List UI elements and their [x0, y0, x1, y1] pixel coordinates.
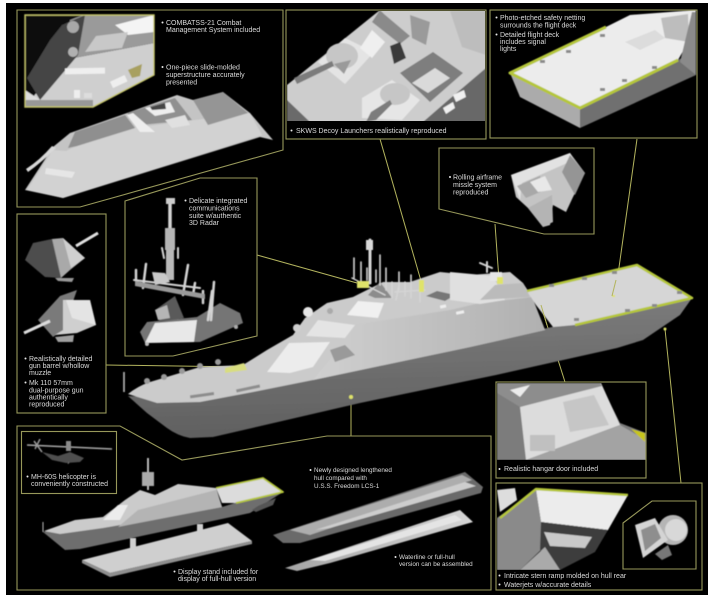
text: helicopter: conveniently constructed — [31, 481, 108, 488]
panel: gun — [17, 214, 106, 413]
text: waterline: Waterline or full-hull — [399, 554, 455, 561]
launcher render — [287, 10, 486, 122]
text: Mk 110 — [24, 380, 84, 408]
waterjet inset — [623, 501, 696, 569]
panel: communications suite — [125, 178, 257, 356]
text: communications: 3D Radar — [189, 220, 220, 227]
text: flight deck — [496, 32, 560, 53]
text: waterline — [394, 554, 473, 568]
text: rolling airframe — [449, 174, 502, 196]
text: communications — [184, 198, 247, 227]
panel frame — [17, 214, 106, 413]
text: new hull: hull compared with — [314, 475, 367, 482]
display stand — [82, 523, 252, 577]
flight deck render — [510, 10, 696, 128]
text: gun barrel: gun barrel w/hollow — [29, 363, 90, 370]
text: helicopter: MH-60S helicopter is — [31, 474, 96, 481]
deck signal lights — [549, 271, 682, 321]
panel frame — [125, 178, 257, 356]
waterjet render — [635, 515, 688, 560]
communications render — [134, 198, 243, 346]
text: rolling airframe: reproduced — [453, 190, 489, 196]
text: Mk 110: dual-purpose gun — [29, 388, 84, 394]
helicopter render — [27, 439, 112, 464]
text: Mk 110: authentically — [29, 394, 68, 402]
text: combat system: COMBATSS-21 Combat — [166, 20, 241, 27]
text: rolling airframe: Rolling airframe — [453, 174, 502, 182]
aft deckhouse details — [440, 262, 530, 315]
text: safety netting: surrounds the flight deck — [500, 22, 577, 30]
panel frame — [286, 10, 486, 139]
text: communications: suite w/authentic — [189, 213, 242, 220]
text: superstructure: superstructure accurately — [166, 72, 245, 79]
panel: combat system — [17, 10, 283, 207]
inset: superstructure interior — [25, 15, 273, 198]
gun renders — [24, 233, 98, 342]
text: display stand — [174, 569, 259, 583]
inset: helicopter — [22, 432, 116, 494]
hangar render — [497, 383, 646, 460]
text: communications: Delicate integrated — [189, 198, 247, 205]
forward deck fittings — [124, 359, 260, 398]
panel frame — [490, 10, 697, 138]
flight deck — [527, 265, 692, 327]
text: communications: communications — [189, 206, 240, 212]
leader over flight deck — [612, 280, 616, 296]
leader lines — [106, 139, 681, 483]
panel frame — [439, 148, 594, 234]
bridge front panels — [267, 342, 330, 373]
text: stern ramp: Intricate stern ramp molded on hull rear — [504, 573, 627, 580]
text: combat system: Management System included — [166, 27, 260, 34]
text: hangar door: Realistic hangar door included — [504, 466, 598, 473]
text: Mk 110: reproduced — [29, 402, 65, 408]
panel: stern ramp — [496, 483, 702, 590]
text: gun barrel: muzzle — [29, 370, 51, 377]
text: flight deck: lights — [500, 46, 517, 53]
panel frame — [496, 483, 702, 590]
superstructure model — [25, 92, 273, 198]
text: new hull: Newly designed lengthened — [314, 467, 392, 474]
text: rolling airframe: missle system — [453, 182, 497, 189]
complete ship model — [43, 458, 283, 550]
text: combat system — [162, 20, 260, 34]
text: helicopter — [26, 474, 108, 488]
ship foredeck and superstructure — [128, 272, 545, 403]
long hull — [273, 472, 483, 543]
text: gun barrel — [24, 356, 93, 377]
text: display stand: Display stand included for — [178, 569, 259, 576]
waterline hull — [285, 510, 473, 571]
connector points — [349, 277, 666, 399]
text: display stand: display of full-hull version — [178, 576, 256, 583]
text: new hull: U.S.S. Freedom LCS-1 — [314, 483, 380, 490]
panel: decoy launchers — [286, 10, 486, 139]
text: superstructure: One-piece slide-molded — [166, 64, 240, 72]
panel frame — [17, 10, 283, 207]
panel: full model and options — [17, 426, 491, 590]
inset frame — [25, 15, 154, 107]
ship dome masts — [293, 240, 425, 332]
panel frame — [17, 426, 491, 590]
text: flight deck: includes signal — [500, 39, 546, 46]
text: waterline: version can be assembled — [399, 561, 473, 568]
ship side wall — [313, 297, 545, 380]
panel: rolling airframe missile — [439, 148, 594, 234]
panel frame — [496, 382, 646, 478]
leader over hangar — [541, 305, 547, 325]
text: waterjets: Waterjets w/accurate details — [504, 582, 592, 589]
main ship model — [124, 240, 692, 438]
text: new hull — [310, 467, 392, 490]
yellow highlight on gun — [225, 363, 247, 373]
text: flight deck: Detailed flight deck — [500, 32, 560, 39]
inset frame — [22, 432, 116, 494]
ship hull — [128, 298, 692, 438]
stern render — [497, 488, 628, 570]
text: superstructure — [162, 64, 245, 86]
text: decoy launchers: SKWS Decoy Launchers realistically reproduced — [296, 128, 447, 135]
text: safety netting: Photo-etched safety netting — [500, 15, 585, 22]
panel: flight deck — [490, 10, 697, 138]
flight deck safety netting — [527, 265, 692, 325]
panel: hangar door — [496, 382, 646, 478]
text: superstructure: presented — [166, 80, 197, 86]
text: gun barrel: Realistically detailed — [29, 356, 93, 363]
inset frame — [623, 501, 696, 569]
text: Mk 110: Mk 110 57mm — [29, 380, 73, 387]
missile launcher render — [511, 153, 585, 227]
text: safety netting — [496, 15, 585, 30]
